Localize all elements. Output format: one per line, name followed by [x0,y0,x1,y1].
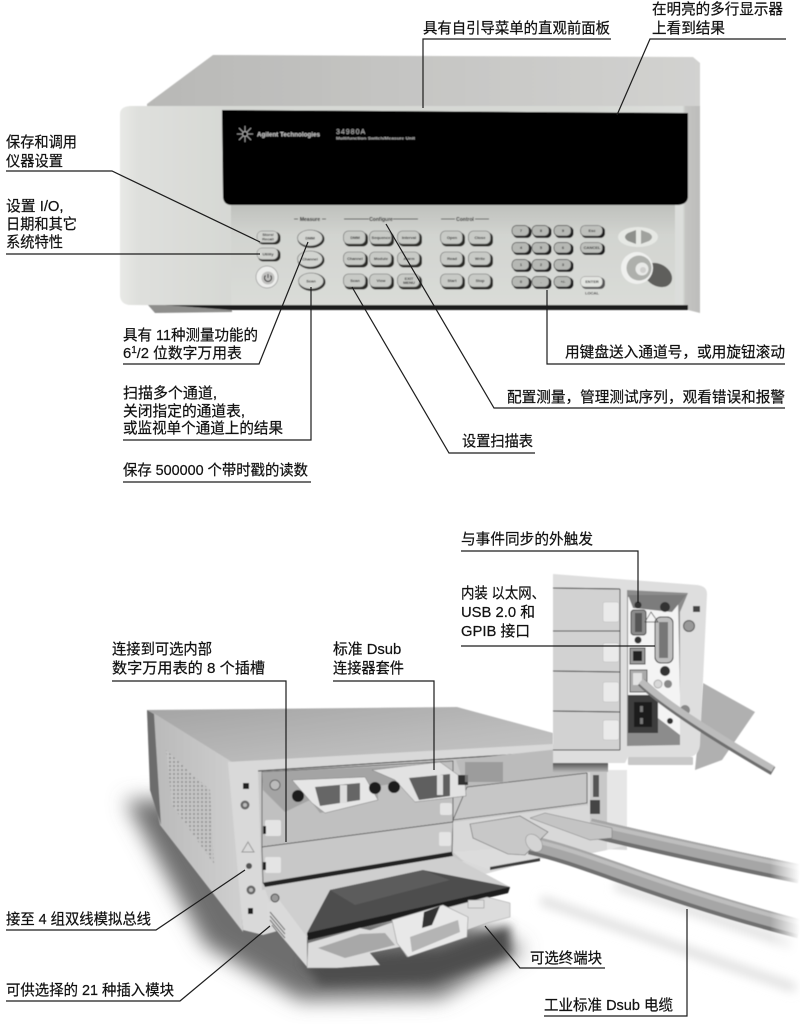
keypad: 7 [520,228,523,233]
callout: Dsub cable [544,909,687,1016]
callout: utility: 系统特性 [6,234,63,251]
control buttons: Start [447,278,457,283]
inset LAN cable [641,681,773,771]
callout: scan list: 设置扫描表 [462,433,533,450]
callout: external trigger: 与事件同步的外触发 [461,531,593,548]
callout: front panel menu: 具有自引导菜单的直观前面板 [423,19,610,37]
keypad: Esc [588,228,596,233]
inset USB port [630,648,645,664]
knob [621,252,676,292]
callout: keypad and knob: 用键盘送入通道号，或用旋钮滚动 [565,343,785,361]
callout: utility: 设置 I/O, [6,198,64,215]
arrow buttons [618,227,658,247]
floor shadow under module [300,925,510,985]
callout: Dsub connector kit [333,641,434,770]
callout: keypad and knob [547,290,785,364]
callout: scan list [352,287,535,453]
left utility buttons: Store/ [262,232,275,237]
callout: Ethernet USB GPIB [461,585,655,646]
callout: store and recall: 仪器设置 [6,153,63,170]
control buttons: Write [475,256,486,261]
left utility buttons [256,231,280,288]
terminal block clip [307,897,510,968]
model number: Multifunction Switch/Measure Unit [336,136,416,140]
callout: analog bus [6,870,245,930]
cable shadows [541,885,795,988]
measure buttons: Channel [302,256,318,262]
Dsub hood upper [530,813,612,840]
callout: configure [386,224,785,408]
module tray [263,855,510,937]
rear frame [228,744,627,935]
callout: Dsub connector kit: 标准 Dsub [333,641,401,658]
callout: DMM: 6 [123,346,131,362]
top cover [147,707,553,763]
lower right panel and rear ports [453,770,627,870]
callout: Ethernet USB GPIB: USB 2.0 和 [461,604,535,621]
handle [392,905,468,957]
keypad: 4 [520,245,523,250]
inset slots [553,588,620,750]
module slots [258,746,587,883]
cable end fade [770,850,800,960]
Dsub connector kit left [262,764,450,813]
control buttons: Close [475,235,486,240]
inset floor shadow [695,683,755,770]
keypad: 5 [540,245,543,250]
Dsub connector kit right [372,762,503,802]
display window [222,110,688,205]
callout: multi-line display: 上看到结果 [652,20,725,37]
foot strip [148,305,688,313]
module side with vents [268,897,307,967]
callout: eight slots: 连接到可选内部 [112,641,212,658]
callout: Ethernet USB GPIB: 内装 以太网、 [461,585,545,602]
callout: Dsub cable: 工业标准 Dsub 电缆 [544,997,673,1014]
keypad: 2 [540,262,543,267]
configure buttons: Alarm [403,256,415,261]
callout: plug-in modules [6,926,270,1001]
keypad: 9 [562,228,565,233]
measure buttons: Scan [306,278,316,284]
control buttons: Read [447,256,457,261]
plug-in module [263,852,510,968]
top cover [147,55,700,108]
keypad: 3 [562,262,565,267]
left utility buttons: Recall [262,236,274,242]
configure buttons: Sequence [372,235,391,240]
configure buttons: Interval [402,235,416,240]
configure buttons: Scan [350,278,360,283]
keypad: 1 [520,262,523,267]
device: rear view of the instrument [125,707,800,1000]
Dsub hood lower [470,816,548,855]
callout: utility: 日期和其它 [6,215,77,233]
callout: scan channels: 关闭指定的通道表, [123,403,245,420]
button group headings: Control [456,217,474,223]
callout: store and recall [6,134,260,242]
configure buttons: Channel [347,256,363,261]
front bezel [120,106,700,313]
cable: upper Dsub [590,823,800,874]
configure buttons: MENU [403,280,415,285]
control buttons [440,231,493,290]
configure buttons [344,231,422,290]
callout: DMM: 2 位数字万用表 [141,346,242,362]
callout: external trigger [461,531,638,603]
callout: terminal block [485,926,605,968]
model number: 34980A [336,129,366,136]
callout: terminal block: 可选终端块 [530,950,602,967]
callout: scan channels: 或监视单个通道上的结果 [123,420,283,437]
callout: scan channels: 扫描多个通道, [123,385,217,402]
inset wedge [553,763,608,772]
callout: plug-in modules: 可供选择的 21 种插入模块 [6,982,174,999]
control buttons: Stop [476,278,485,283]
inset GPIB port [655,602,673,676]
keypad [512,226,605,296]
callout: DMM: 具有 11种测量功能的 [123,327,258,344]
inset power inlet [628,695,658,733]
keypad: +/- [561,279,566,284]
keypad: . [540,279,542,284]
inset recess and label panel [627,590,688,746]
callout: multi-line display: 在明亮的多行显示器 [652,1,783,18]
keypad: CANCEL [584,245,601,250]
callout: analog bus: 接至 4 组双线模拟总线 [6,911,151,928]
callout: multi-line display [617,1,786,115]
configure buttons: View [376,278,386,283]
callout: Dsub connector kit: 连接器套件 [333,660,404,677]
keypad: 8 [540,228,543,233]
white inset backdrop [553,563,800,733]
callout: store and recall: 保存和调用 [6,134,77,151]
control buttons: Open [447,235,458,240]
callout: utility [6,198,260,254]
dark cover [307,870,510,940]
button group headings [294,217,489,223]
callout: Ethernet USB GPIB: GPIB 接口 [461,623,530,640]
keypad: 6 [562,245,565,250]
logo: Agilent star [237,126,253,142]
callout: stored readings: 保存 500000 个带时戳的读数 [123,462,308,479]
configure buttons: Module [374,256,389,261]
callout: DMM [123,242,308,364]
callout: DMM: / [137,345,141,361]
configure buttons: DMM [350,235,360,240]
callout: scan channels [123,287,311,440]
button panel [231,205,675,305]
inset LAN port [630,670,647,692]
cable: lower Dsub [530,840,800,929]
callout: eight slots [112,641,286,842]
button group headings: Configure [369,217,393,223]
model number [336,129,416,140]
left utility buttons: Utility [262,252,274,256]
left side with vents [147,710,243,932]
inset foot [628,757,693,765]
keypad: LOCAL [585,290,599,296]
left frame screws [240,783,256,914]
brand name: Agilent Technologies [257,132,320,138]
button group headings: Measure [300,217,320,223]
floor shadow left of chassis [125,800,525,1000]
inset: rear panel close-up [553,563,800,772]
callout: eight slots: 数字万用表的 8 个插槽 [112,660,265,677]
inset chassis [553,574,707,763]
callout: configure: 配置测量，管理测试序列，观看错误和报警 [507,389,785,406]
callout: front panel menu [423,19,611,108]
configure buttons: EXIT [405,276,414,281]
keypad: 0 [520,279,523,284]
inset DB9 port [631,602,646,644]
inset small marks [645,606,700,724]
measure buttons: DMM [305,236,315,240]
keypad: ENTER [585,279,599,284]
callout: DMM: 1 [131,345,137,356]
device: front view of the instrument [120,55,700,313]
measure buttons [298,230,326,291]
